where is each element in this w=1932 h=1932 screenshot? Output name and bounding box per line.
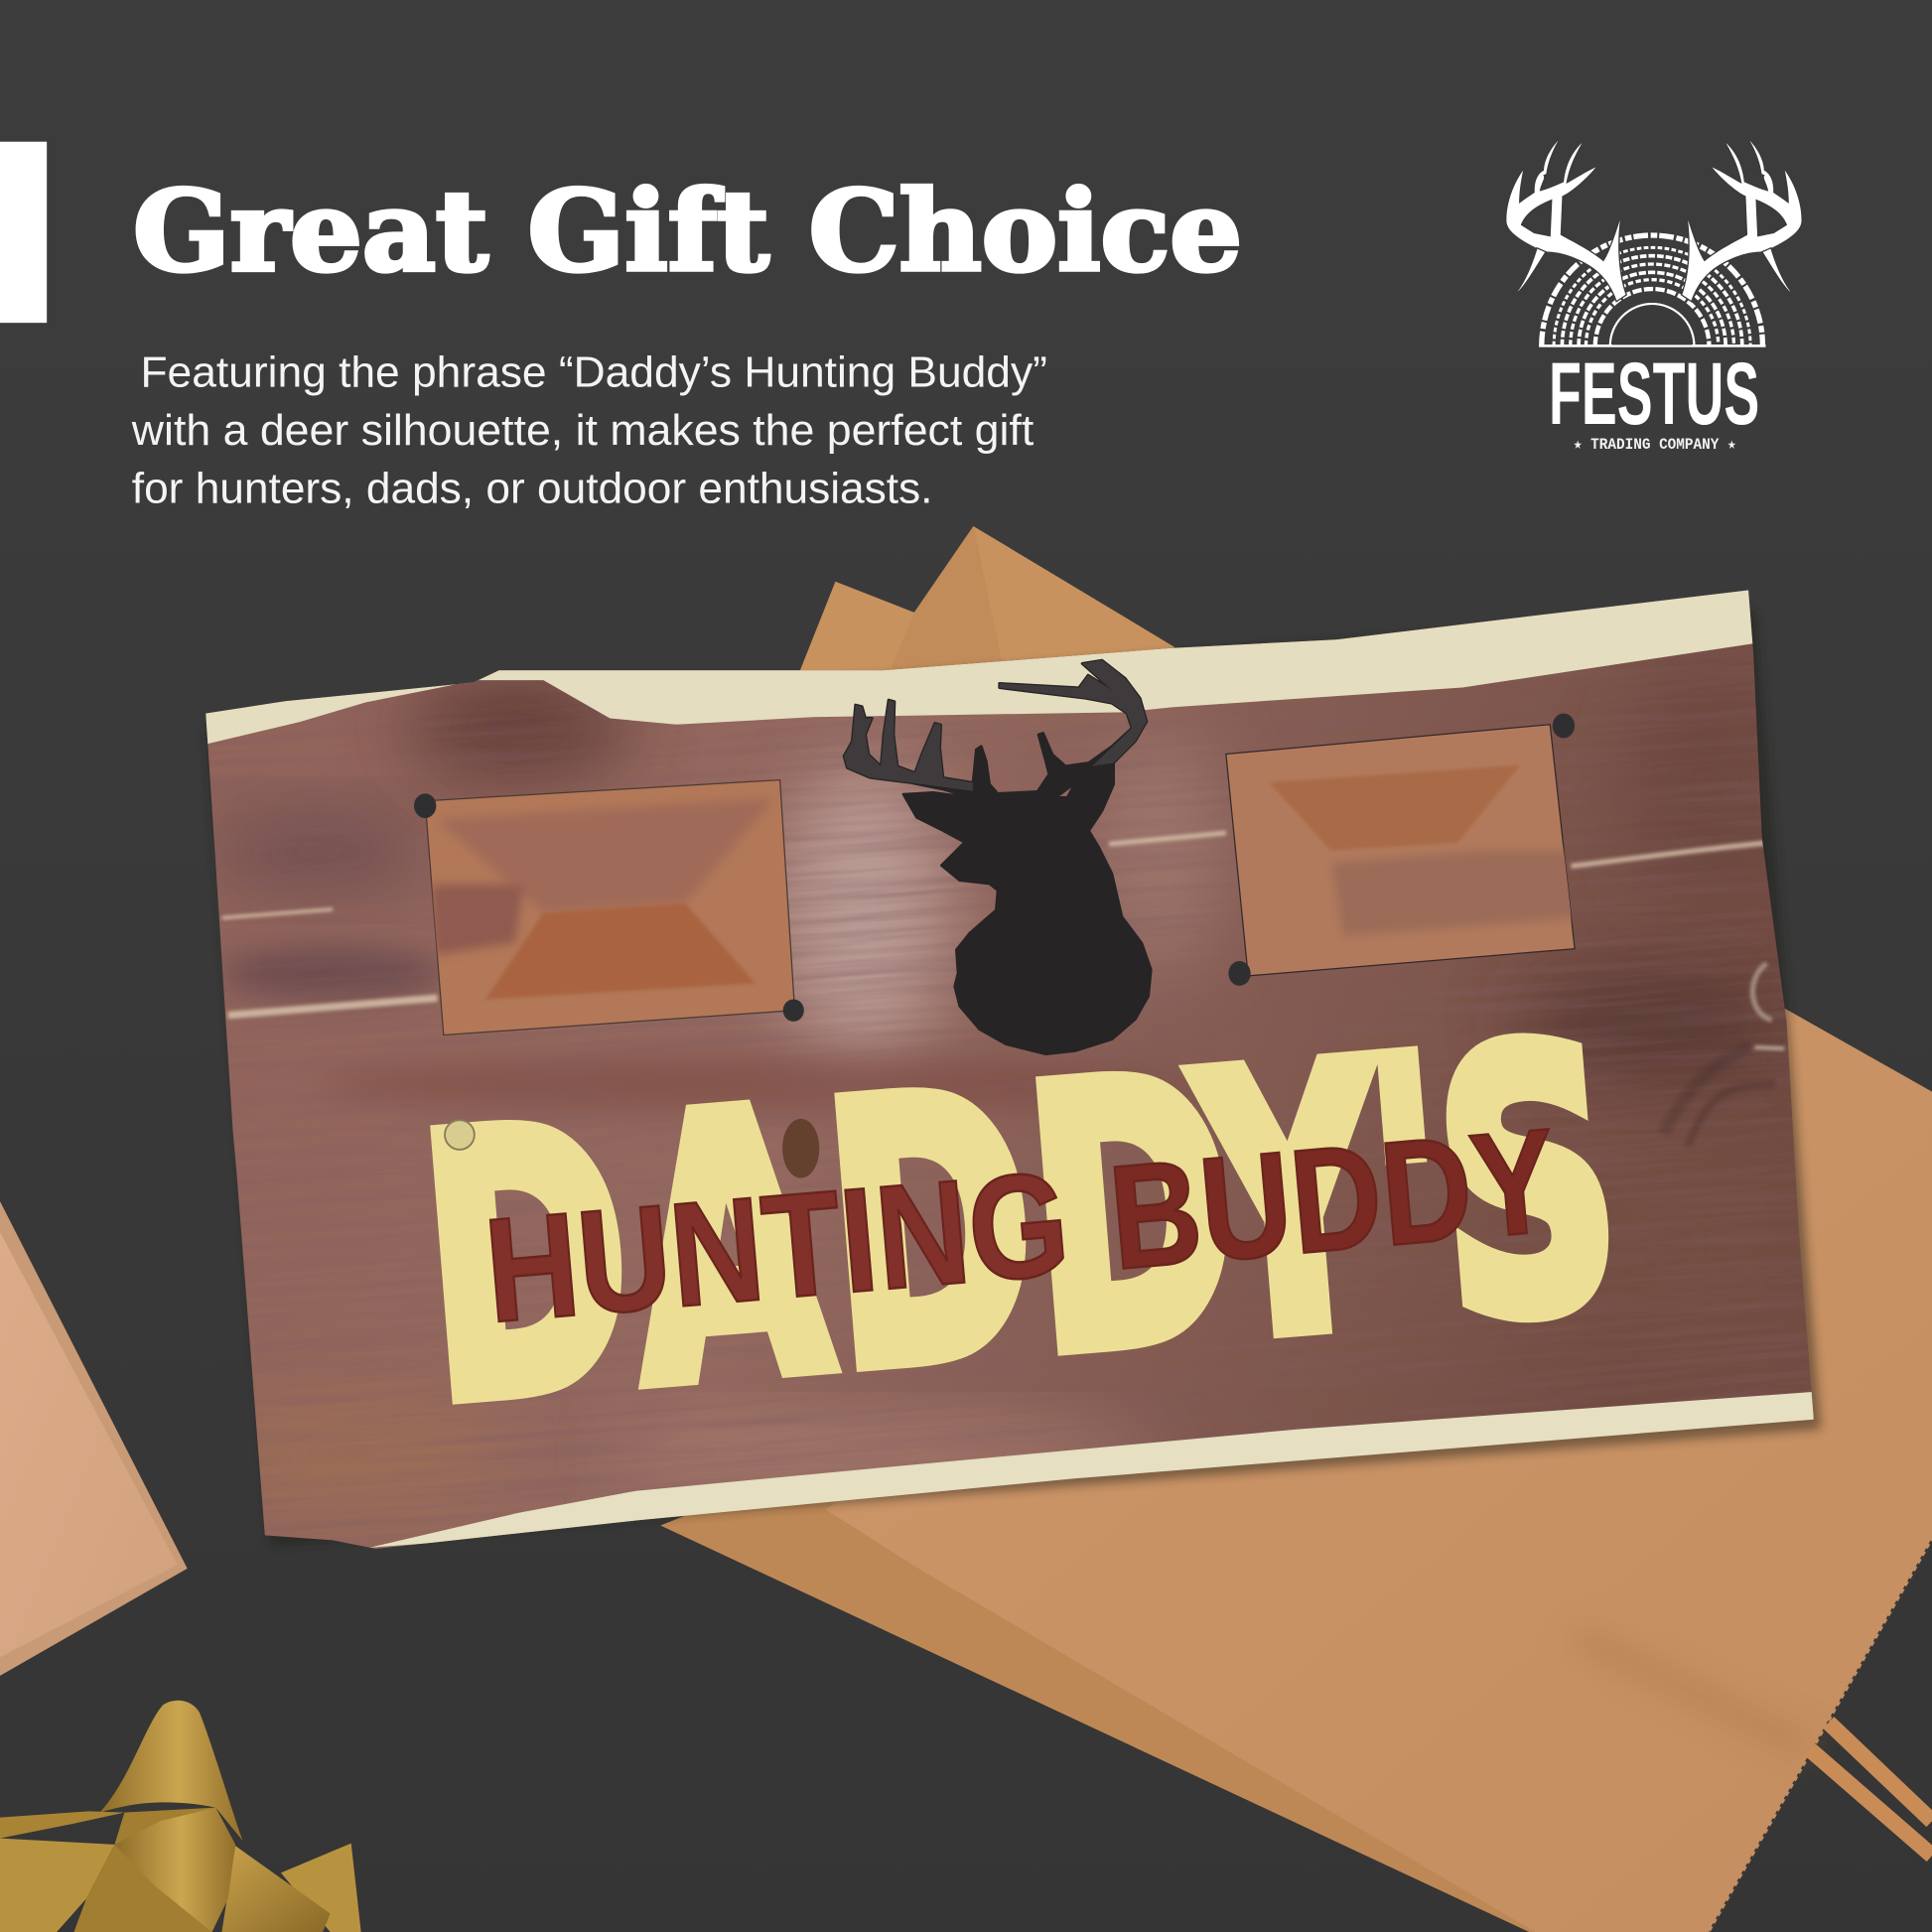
paper bag: front panel fold [1565, 1624, 1814, 1759]
DADDY'S painted lettering: DADDY'S [410, 969, 1632, 1480]
logo: Festus Trading Company [1506, 141, 1801, 454]
nail ring on lettering [445, 1120, 475, 1150]
description text: Featuring the phrase “Daddy’s Hunting Buddy” [140, 349, 1047, 397]
description text: with a deer silhouette, it makes the perfect gift [131, 407, 1034, 455]
description text [131, 349, 1047, 512]
board: wood tone patches and grain [88, 470, 1883, 1647]
board: light grain streaks [221, 833, 1768, 1016]
paper bag: back layer [660, 1417, 1601, 1932]
left photo cutout panel [425, 780, 794, 1035]
board: sapwood bottom edge [369, 1391, 1824, 1548]
board shadow [206, 610, 1821, 1547]
logo emblem: left antler [1506, 141, 1625, 301]
gold ribbon bow [0, 1701, 361, 1932]
right photo cutout panel [1226, 725, 1584, 976]
board: wood face [206, 590, 1814, 1549]
gift box [0, 1201, 188, 1676]
logo emblem: right antler [1682, 141, 1801, 301]
deer head silhouette [844, 660, 1151, 1054]
knot on lettering [782, 1119, 819, 1177]
paper bag: twisted handles [1810, 1723, 1932, 1856]
wooden sign board [206, 590, 1814, 1549]
title: Great Gift Choice [133, 167, 1242, 297]
board: sapwood top edge [198, 586, 1756, 745]
paper bag: serrated bottom edge [1711, 1542, 1932, 1932]
paper bag: front panel [826, 1007, 1932, 1932]
logo tagline: ★ TRADING COMPANY ★ [1574, 436, 1736, 454]
paper bag: back flaps [792, 526, 1174, 690]
white accent bar [0, 142, 47, 323]
BUDDY lettering: BUDDY [1103, 1097, 1563, 1301]
logo wordmark: FESTUS [1549, 344, 1759, 443]
logo emblem: tree rings and antlers [1506, 141, 1801, 347]
screws [414, 714, 1575, 1022]
board: knot on right edge [1663, 964, 1784, 1146]
HUNTING lettering: HUNTING [480, 1140, 1075, 1354]
description text: for hunters, dads, or outdoor enthusiasts. [132, 465, 932, 512]
